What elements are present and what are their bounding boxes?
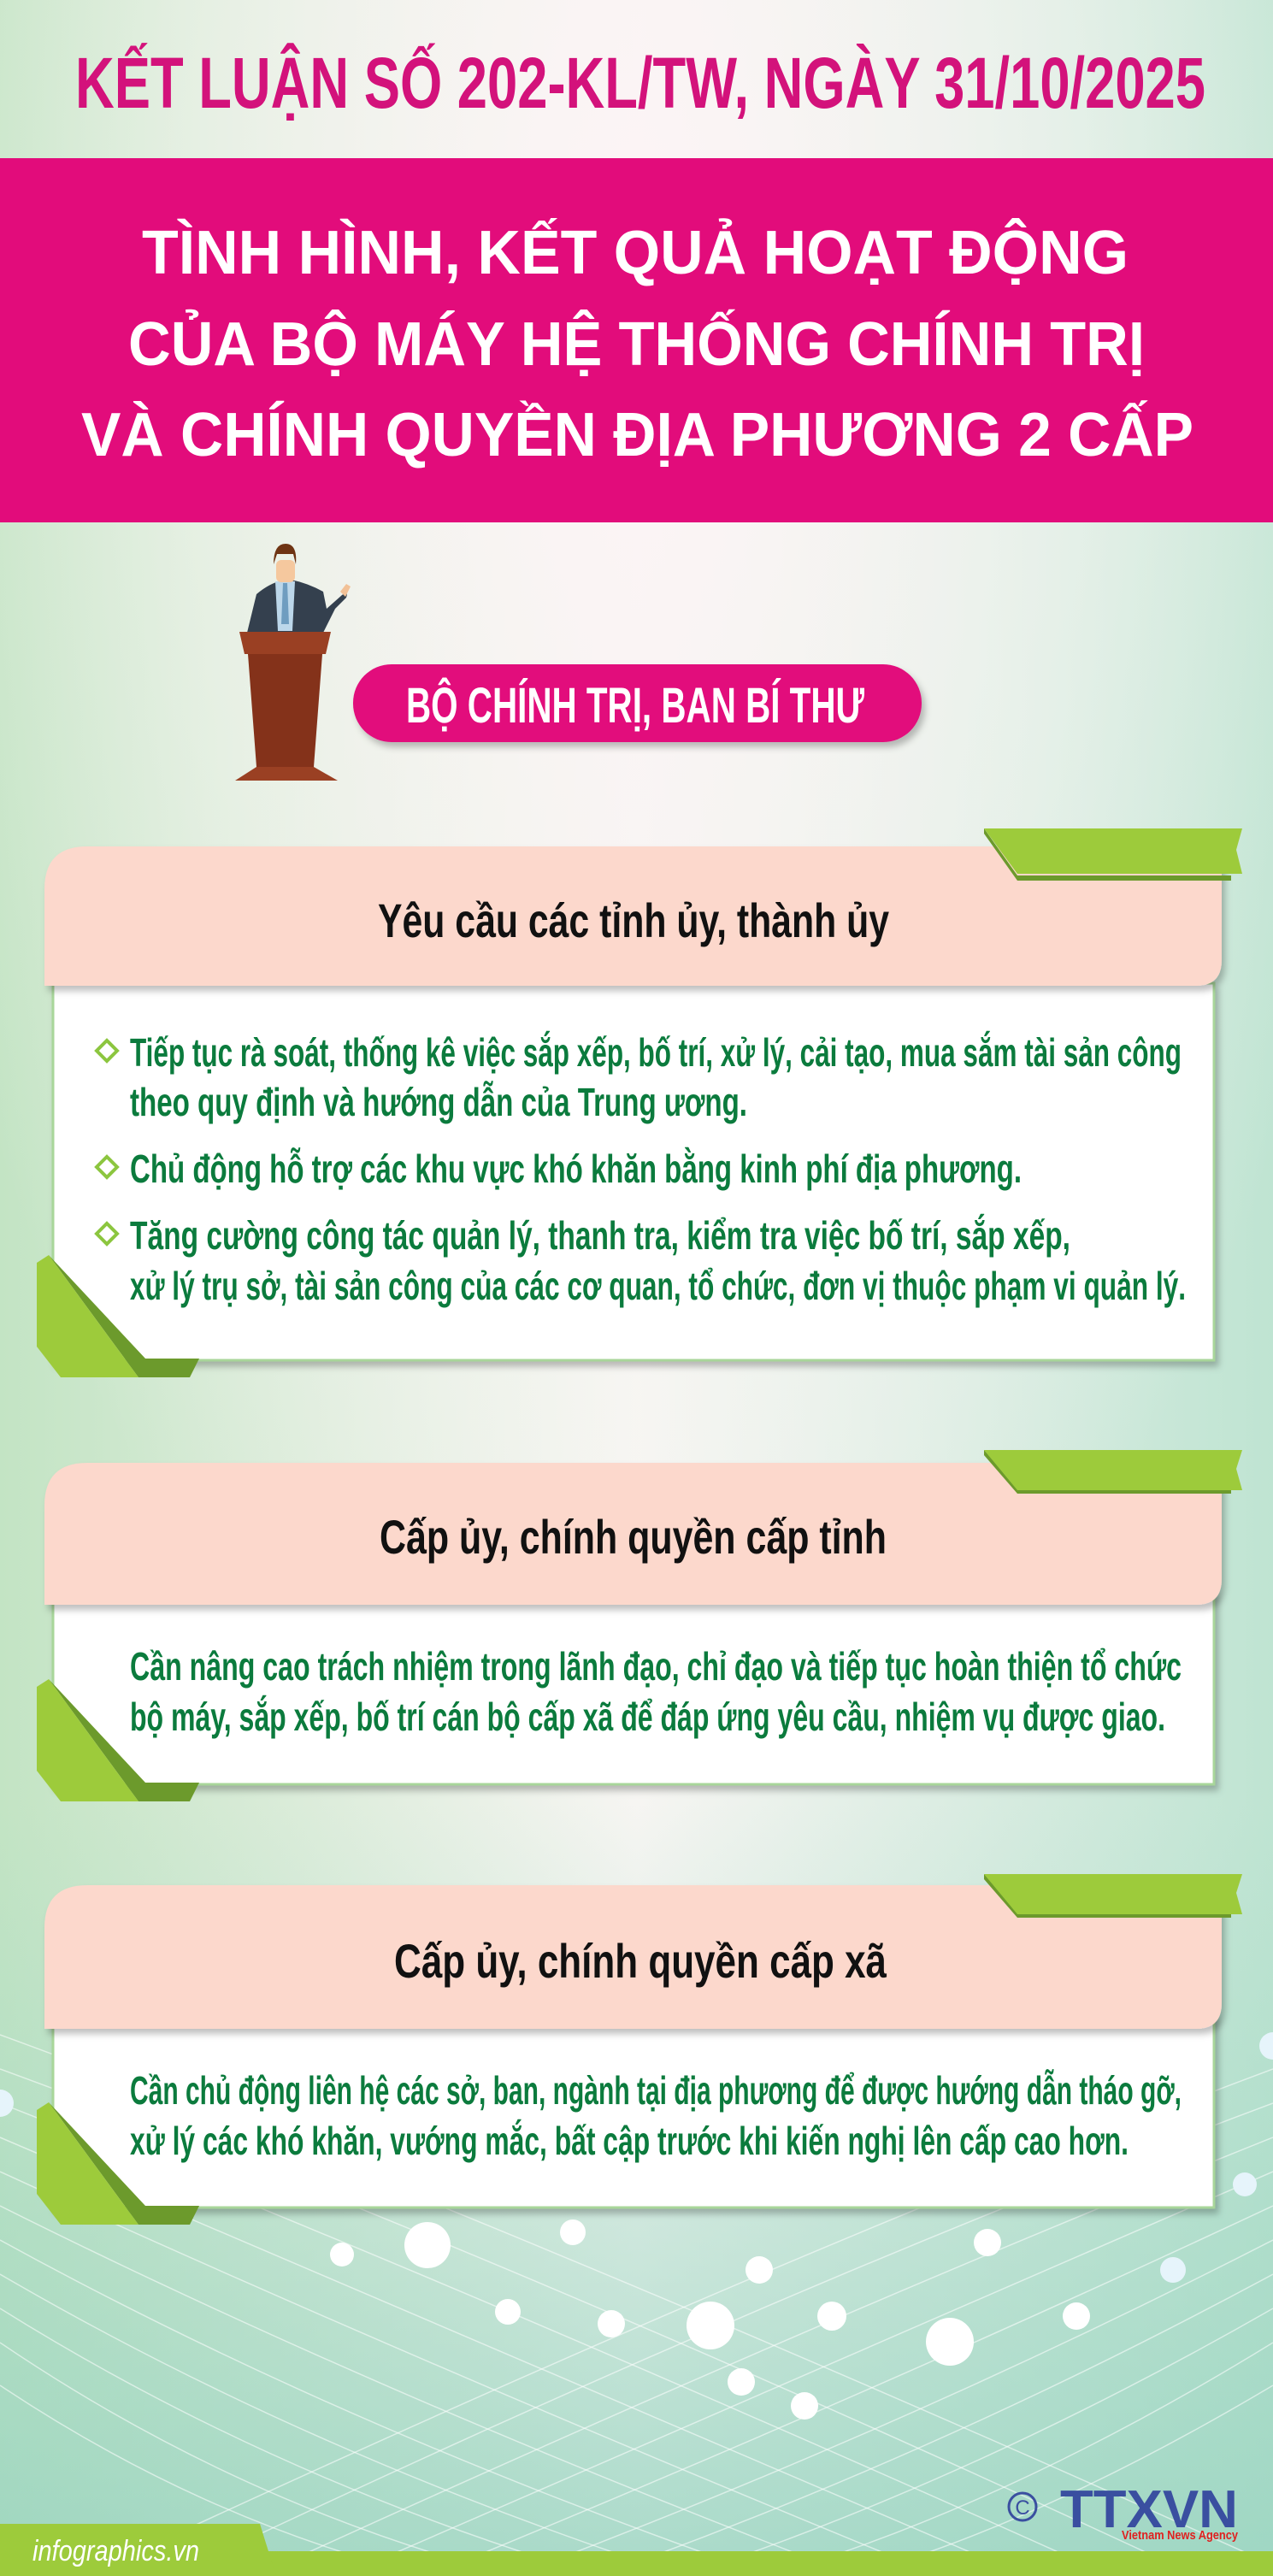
panel: card 2 xyxy=(37,1450,1242,1801)
logo: TTXVN: TTXVN xyxy=(1060,2480,1238,2539)
bullets card 1: theo quy định và hướng dẫn của Trung ương. xyxy=(130,1080,747,1124)
header card 2 xyxy=(44,1463,1222,1605)
banner: main title: TÌNH HÌNH, KẾT QUẢ HOẠT ĐỘNG xyxy=(142,218,1129,287)
icon: speaker at podium xyxy=(235,544,351,781)
heading card 3: Cấp ủy, chính quyền cấp xã xyxy=(394,1934,887,1988)
heading pill: Bộ Chính trị, Ban Bí thư: BỘ CHÍNH TRỊ, BAN BÍ THƯ xyxy=(406,678,865,734)
bullets card 1 xyxy=(97,1030,1186,1308)
text card 3 xyxy=(130,2068,1182,2163)
tab: green ribbon card 3 xyxy=(984,1874,1242,1918)
panel: card 1 xyxy=(37,828,1242,1377)
banner: main title: CỦA BỘ MÁY HỆ THỐNG CHÍNH TRỊ xyxy=(128,309,1145,379)
corner: green triangle card 2 xyxy=(37,1679,199,1801)
header card 1 xyxy=(44,846,1222,986)
panel: card 3 xyxy=(37,1874,1242,2225)
heading card 1: Yêu cầu các tỉnh ủy, thành ủy xyxy=(378,893,889,947)
body box card 2 xyxy=(53,1590,1214,1784)
banner: main title: VÀ CHÍNH QUYỀN ĐỊA PHƯƠNG 2 CẤP xyxy=(81,400,1193,469)
corner: green triangle card 3 xyxy=(37,2102,199,2225)
text card 2 xyxy=(130,1644,1182,1739)
header card 3 xyxy=(44,1885,1222,2029)
body box card 1 xyxy=(53,983,1214,1360)
logo: TTXVN: C xyxy=(1015,2496,1030,2520)
footer bar xyxy=(0,2524,1273,2576)
tab: green ribbon card 1 xyxy=(984,828,1242,881)
tab: green ribbon card 2 xyxy=(984,1450,1242,1494)
heading card 2: Cấp ủy, chính quyền cấp tỉnh xyxy=(380,1510,887,1564)
banner: main title xyxy=(0,158,1273,522)
source text: infographics.vn xyxy=(32,2535,199,2567)
corner: green triangle card 1 xyxy=(37,1255,199,1377)
logo: TTXVN: Vietnam News Agency xyxy=(1122,2528,1239,2543)
heading pill: Bộ Chính trị, Ban Bí thư xyxy=(353,664,922,742)
body box card 3 xyxy=(53,2013,1214,2208)
